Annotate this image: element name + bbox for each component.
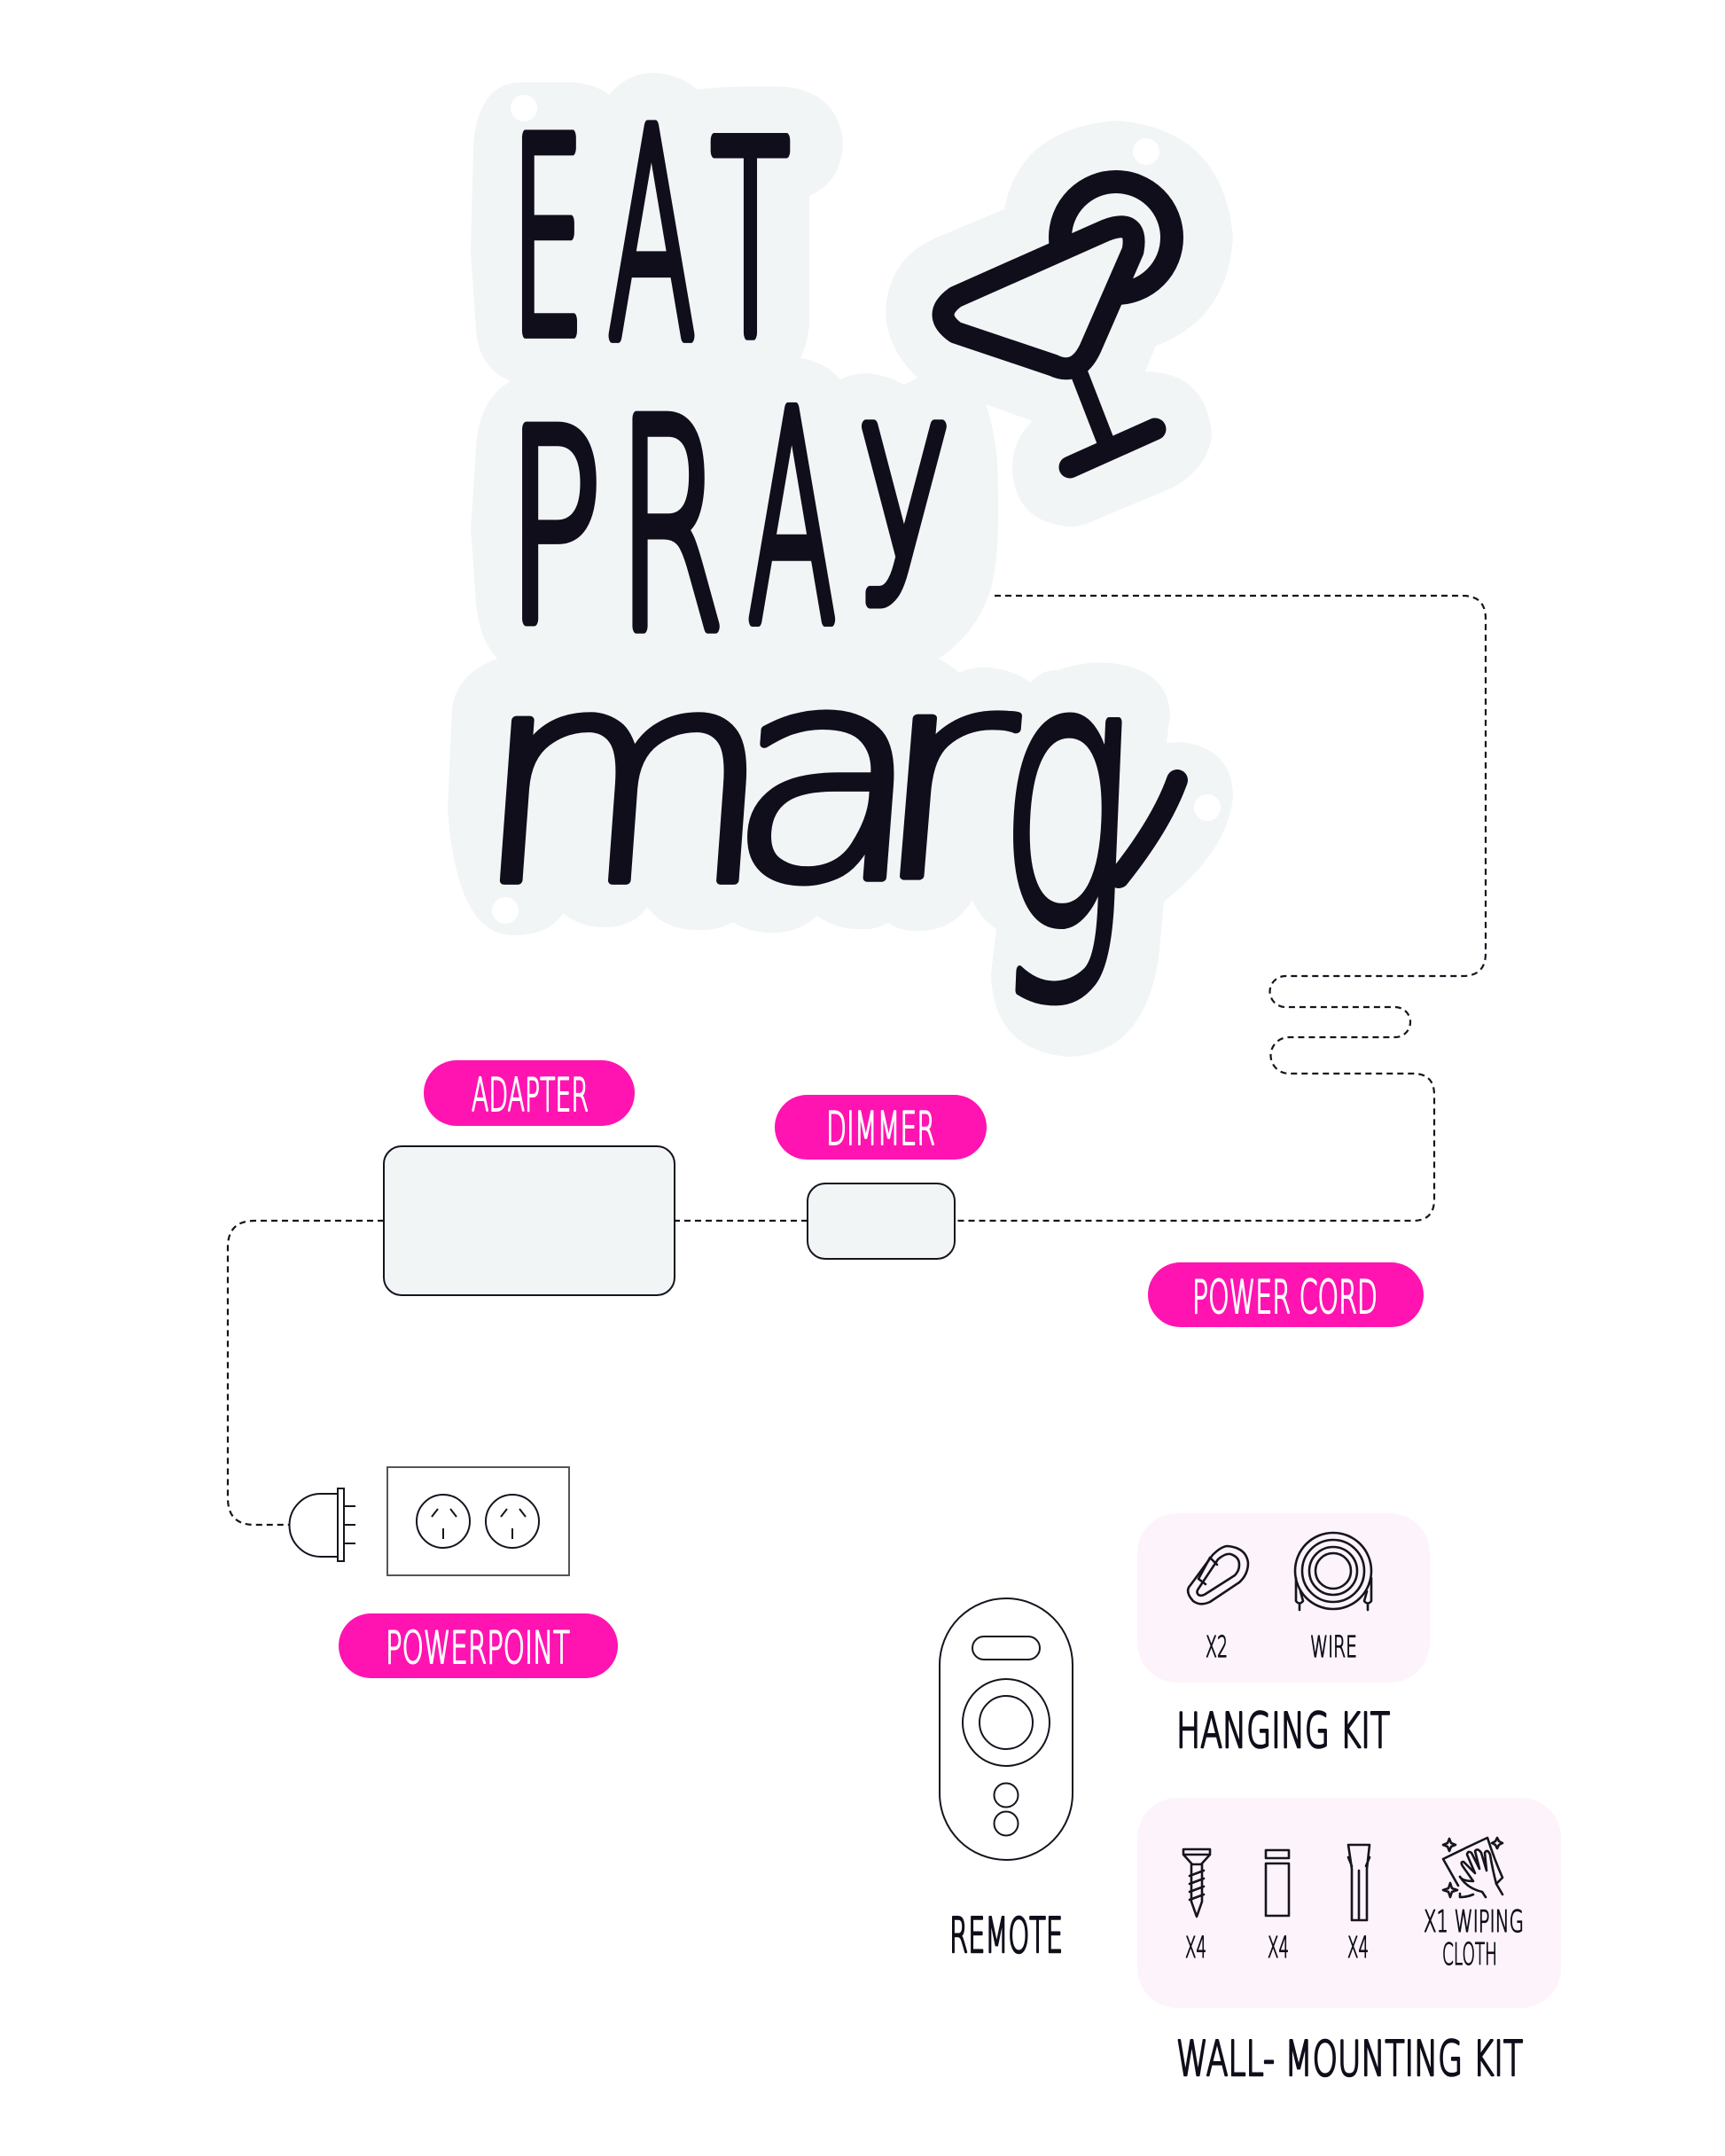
text: x4 screws: X4	[1185, 1930, 1206, 1965]
icon: screw	[1183, 1849, 1210, 1917]
icon: sleeve anchor	[1266, 1850, 1289, 1916]
label: remote: REMOTE	[949, 1908, 1063, 1964]
heading word: marg: g	[991, 582, 1142, 1011]
panel: wall mounting kit	[1137, 1798, 1561, 2008]
icon: plug	[289, 1488, 355, 1561]
text: x1 wiping cloth: X1 WIPING	[1424, 1904, 1524, 1940]
text: x4 plugs: X4	[1347, 1930, 1369, 1965]
heading word: EAT	[511, 70, 789, 403]
cord between dimmer and adapter	[675, 1220, 808, 1222]
text: wire: WIRE	[1310, 1629, 1357, 1664]
label: dimmer	[775, 1095, 987, 1160]
adapter box	[384, 1146, 675, 1295]
label: adapter: ADAPTER	[472, 1069, 589, 1122]
dimmer box	[808, 1183, 955, 1259]
label: powerpoint	[339, 1613, 618, 1678]
heading word: marg: r	[861, 608, 1030, 944]
power cord from sign to dimmer	[955, 596, 1486, 1221]
heading: wall mounting kit: WALL- MOUNTING KIT	[1176, 2031, 1523, 2087]
cord from adapter to plug	[228, 1221, 384, 1525]
heading word: EAT: T	[711, 89, 789, 396]
heading word: marg	[464, 582, 1177, 1011]
panel: hanging kit	[1137, 1513, 1430, 1683]
icon: coiled wire	[1295, 1533, 1371, 1610]
text: x1 wiping cloth: CLOTH	[1442, 1937, 1497, 1972]
heading word: EAT: E	[511, 84, 584, 394]
heading word: PRAY: A	[748, 354, 836, 688]
label: power cord	[1148, 1262, 1424, 1327]
icon: carabiner	[1188, 1546, 1248, 1604]
heading word: PRAY: P	[507, 378, 602, 682]
text: x4 sleeves: X4	[1268, 1930, 1289, 1965]
panel: acrylic sign backing	[448, 73, 1233, 1057]
icon: remote	[940, 1598, 1073, 1860]
icon: wall plug	[1348, 1845, 1370, 1920]
heading word: EAT: A	[608, 70, 696, 403]
label: powerpoint: POWERPOINT	[386, 1622, 570, 1674]
label: adapter	[424, 1060, 635, 1126]
heading word: marg: a	[717, 606, 939, 947]
heading word: PRAY: y	[858, 336, 950, 613]
icon: wall powerpoint	[387, 1467, 569, 1575]
label: power cord: POWER CORD	[1192, 1271, 1378, 1324]
icon: wiping cloth	[1443, 1838, 1503, 1897]
heading word: PRAY	[507, 336, 950, 693]
text: x2: X2	[1206, 1629, 1228, 1664]
heading word: PRAY: R	[617, 362, 724, 693]
heading word: marg: m	[464, 609, 786, 949]
heading: hanging kit: HANGING KIT	[1176, 1703, 1390, 1759]
label: dimmer: DIMMER	[826, 1103, 935, 1156]
icon: margarita glass	[943, 182, 1172, 467]
